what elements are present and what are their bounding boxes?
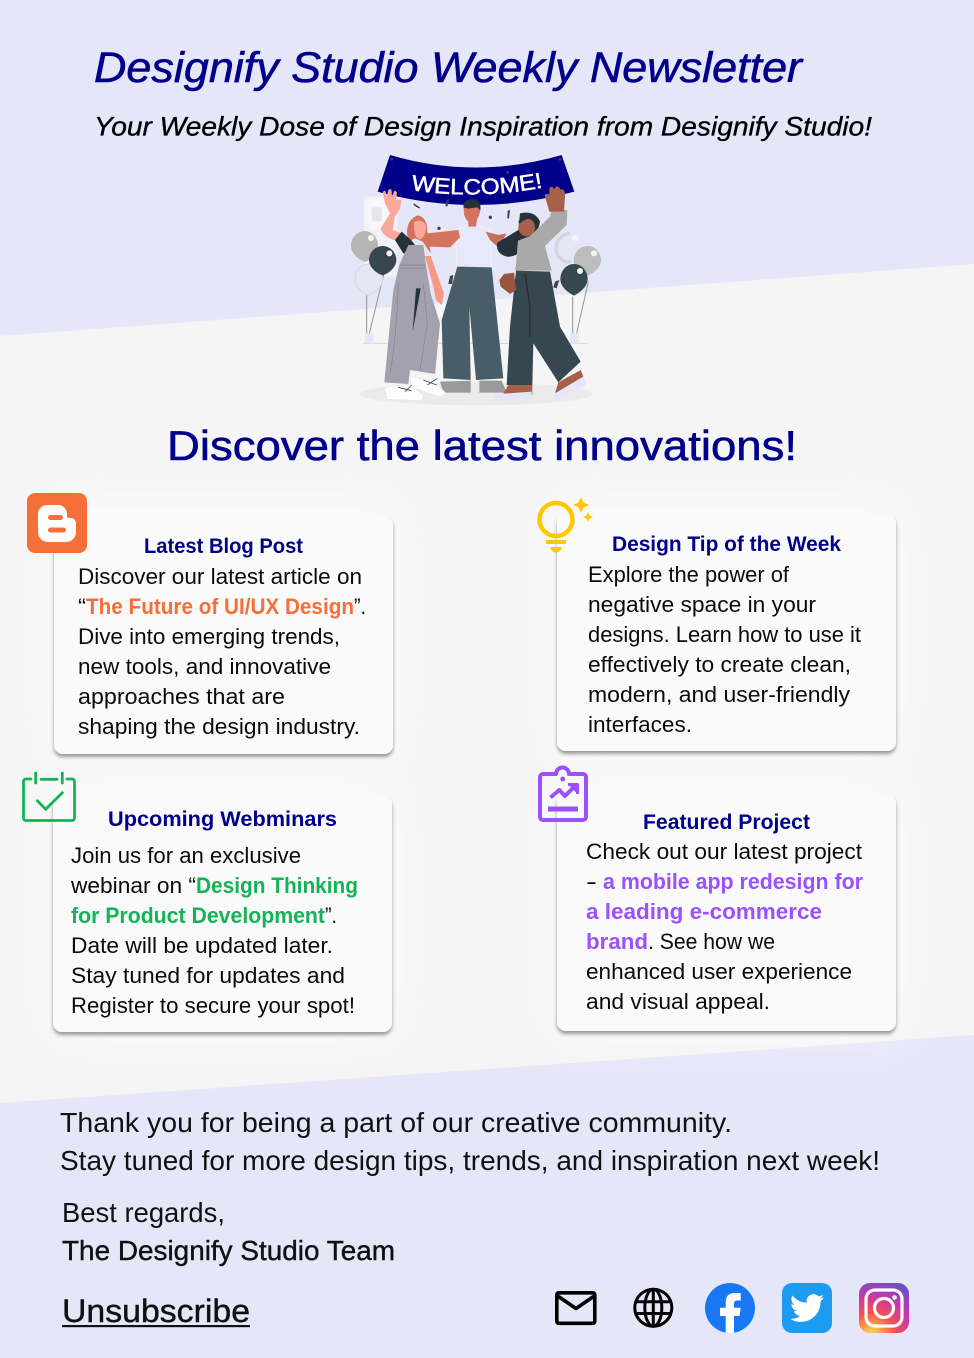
sign-off: The Designify Studio Team [62,1235,395,1266]
closing message [60,1107,880,1176]
body text: Design Thinking [196,873,358,898]
card background [54,516,393,754]
body text: interfaces. [588,712,692,737]
sign-off: Best regards, [62,1197,225,1228]
body text [70,843,358,1018]
body text: ”. [325,903,337,928]
panel: upcoming webinars [24,773,392,1032]
body text [78,564,366,739]
body text: modern, and user-friendly [588,682,850,707]
heading: Upcoming Webminars [108,808,337,831]
body text: Check out our latest project [586,839,862,864]
sign-off [62,1197,395,1266]
body text: effectively to create clean, [588,652,851,677]
section heading: Discover the latest innovations! [167,422,797,469]
light diagonal band [0,264,974,1103]
icon: twitter [782,1283,832,1333]
body text: and visual appeal. [586,989,770,1014]
heading: Design Tip of the Week [612,533,841,556]
wall frame [364,197,397,277]
closing message: Stay tuned for more design tips, trends, and inspiration next week! [60,1145,880,1176]
body text: webinar on “ [70,873,196,898]
body text [586,839,863,1014]
icon: facebook [705,1283,755,1334]
body text: negative space in your [588,592,816,617]
body text: a leading e-commerce [586,899,822,924]
card background [557,514,896,751]
closing message: Thank you for being a part of our creative community. [60,1107,732,1138]
body text: Explore the power of [588,562,790,587]
body text: “ [78,594,86,619]
icon: blogger [27,493,87,553]
heading: Featured Project [643,811,810,834]
body text: ”. [354,594,366,619]
icon: calendar check [24,773,74,820]
panel: latest blog post [27,493,393,754]
icon: clipboard chart [540,768,586,820]
body text: Stay tuned for updates and [71,963,345,988]
body text: a mobile app redesign for [603,869,863,894]
ground shadow [359,383,593,405]
unsubscribe link: Unsubscribe [62,1293,250,1329]
banner [378,155,574,205]
body text: shaping the design industry. [78,714,360,739]
body text: Register to secure your spot! [71,993,355,1018]
body text: for Product Development [71,903,326,928]
banner: WELCOME! [412,172,542,195]
body text: Discover our latest article on [78,564,362,589]
body text: designs. Learn how to use it [588,622,861,647]
panel: featured project [540,768,896,1031]
person: left woman [381,189,460,401]
body text: . See how we [648,929,775,954]
confetti [390,158,561,288]
body text: Dive into emerging trends, [78,624,340,649]
icon: instagram [859,1283,909,1333]
icon: light bulb [540,497,593,553]
person: right woman [486,186,587,402]
body text: approaches that are [78,684,285,709]
soft glow behind cards [53,505,896,1032]
body text: brand [586,929,648,954]
body text: enhanced user experience [586,959,852,984]
card background [53,795,392,1032]
body text: Join us for an exclusive [71,843,301,868]
balloons and strings [351,231,601,343]
subtitle: Your Weekly Dose of Design Inspiration from Designify Studio! [94,112,873,142]
body text [588,562,861,737]
body text: Date will be updated later. [71,933,333,958]
heading: Latest Blog Post [144,535,303,558]
icon: mail [557,1293,595,1323]
body text: - [586,869,597,894]
body text: new tools, and innovative [78,654,331,679]
person: middle man [440,199,507,393]
illustration: welcome team [351,155,601,405]
icon: globe [635,1289,672,1326]
body text: The Future of UI/UX Design [86,594,354,619]
panel: design tip of the week [540,497,896,751]
title: Designify Studio Weekly Newsletter [94,44,804,92]
card background [557,794,896,1031]
